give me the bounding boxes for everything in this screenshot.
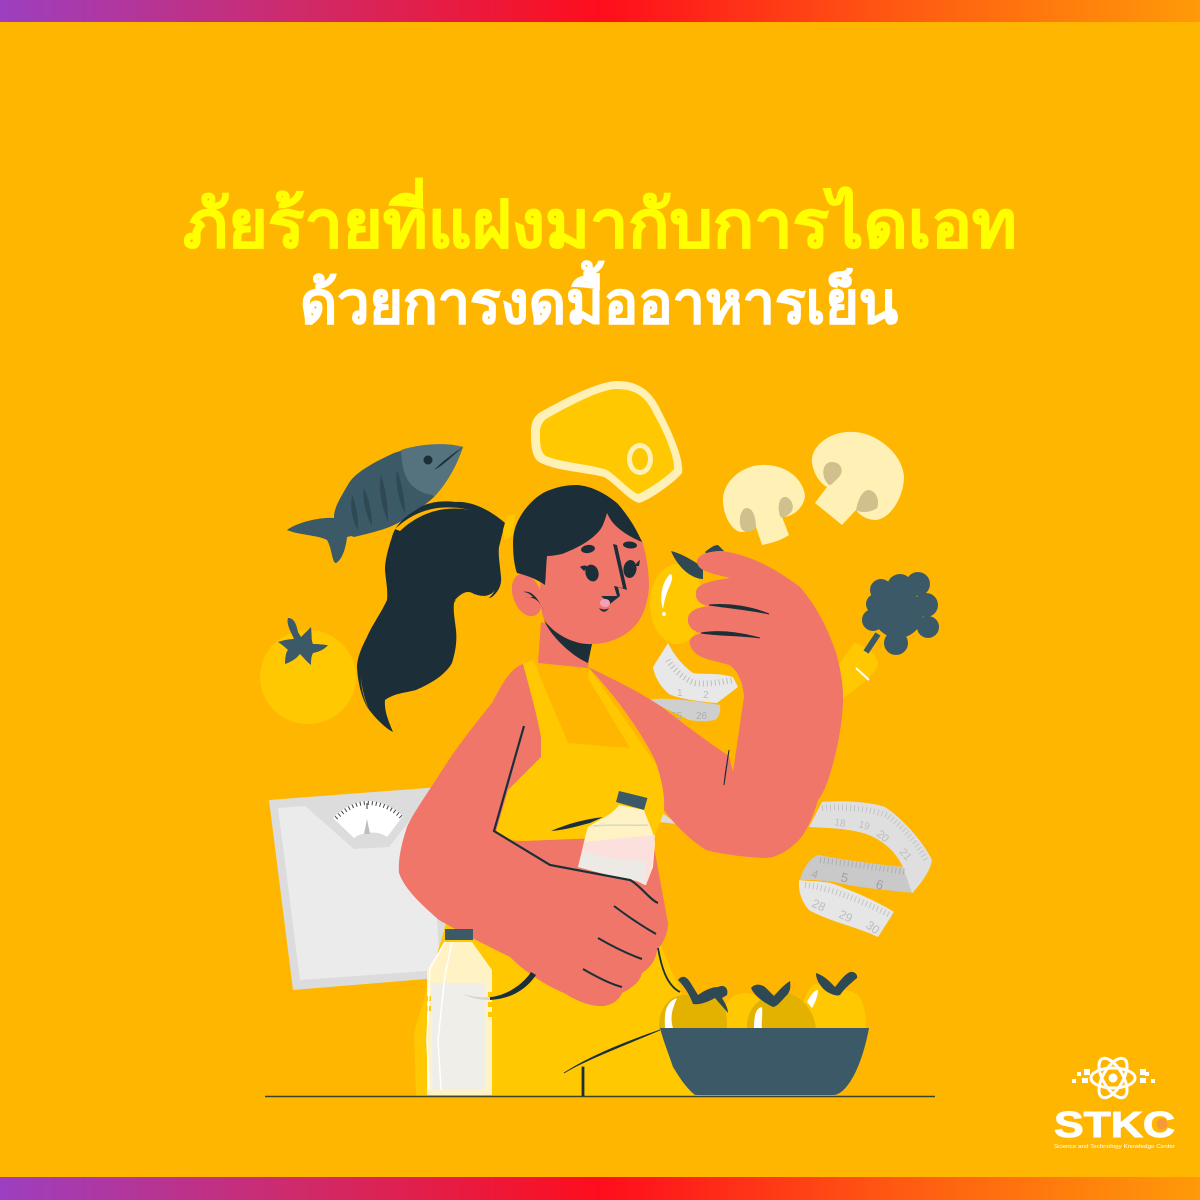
logo: STKC (1054, 1054, 1175, 1150)
icon: measuring tape lower: 21 (897, 846, 914, 863)
icon: broccoli (862, 572, 939, 655)
icon: measuring tape lower: 29 (837, 907, 855, 925)
icon: mushroom right (812, 432, 904, 525)
woman: left shoulder and midriff (407, 664, 668, 923)
icon: measuring tape lower: 6 (874, 876, 885, 893)
icon: measuring tape upper: 1 (677, 688, 683, 699)
icon: measuring tape lower: 18 (833, 817, 847, 830)
icon: measuring tape lower: 30 (863, 918, 883, 937)
icon: carrot (835, 643, 878, 698)
icon: mushroom left (723, 465, 805, 545)
icon: bottle on table (427, 929, 536, 1095)
woman: face and head (506, 485, 649, 644)
icon: measuring tape lower: 28 (810, 896, 828, 914)
icon: apple held in hand (650, 545, 724, 644)
ground line (265, 1096, 935, 1098)
woman: raised arm and fist (551, 551, 843, 858)
icon: measuring tape lower: 4 (810, 868, 819, 881)
logo: STKC: STKC (1054, 1104, 1175, 1145)
icon: fish (287, 444, 463, 563)
icon: measuring tape upper: 2 (703, 690, 709, 701)
icon: measuring tape upper: 26 (696, 711, 708, 722)
title line 1: ภัยร้ายที่แฝงมากับการไดเอท (183, 177, 1017, 261)
icon: measuring tape lower (660, 801, 932, 937)
apron fold line (564, 1030, 660, 1096)
icon: measuring tape lower: 20 (874, 828, 891, 845)
icon: measuring tape lower: 5 (839, 869, 850, 886)
bottom gradient bar (0, 1177, 1200, 1200)
icon: bottle held in hand (578, 791, 655, 885)
icon: apples in bowl (658, 948, 866, 1030)
icon: measuring tape upper: 25 (671, 711, 683, 722)
logo: atom icon (1091, 1054, 1135, 1102)
icon: bowl (660, 1028, 869, 1095)
woman: skirt and top (414, 660, 700, 1096)
icon: tomato (260, 618, 356, 724)
title line 2: ด้วยการงดมื้ออาหารเย็น (300, 261, 898, 336)
woman: neck (538, 620, 592, 668)
woman: arm holding bottle (399, 726, 668, 1006)
logo: STKC: Science and Technology Knowledge Center (1054, 1144, 1175, 1150)
top gradient bar (0, 0, 1200, 22)
icon: measuring tape lower: 19 (857, 819, 871, 833)
icon: weighing scale (269, 787, 450, 990)
woman: eyes, brows, nose and mouth (580, 541, 640, 612)
icon: steak (531, 381, 682, 503)
icon: measuring tape upper (648, 643, 738, 722)
icon: ponytail hair (357, 501, 515, 732)
